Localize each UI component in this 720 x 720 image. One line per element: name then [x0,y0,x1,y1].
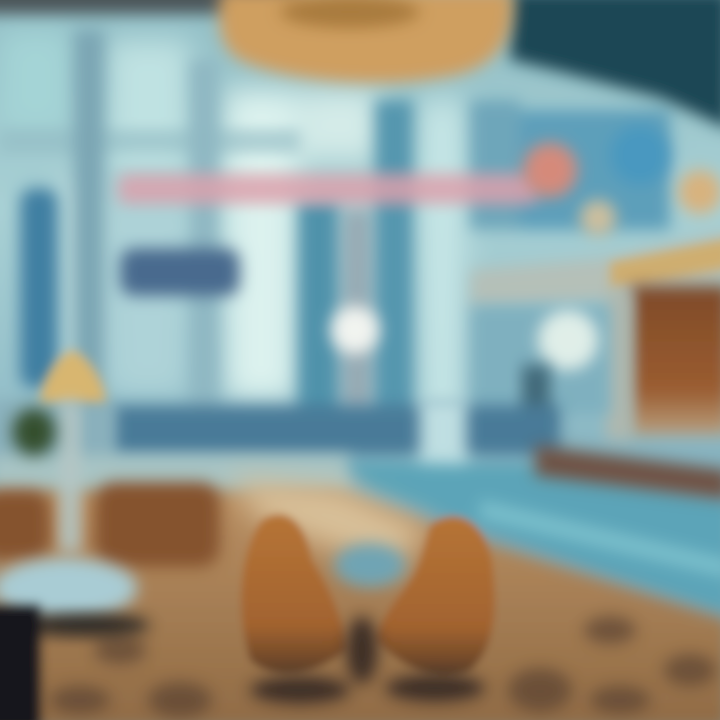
lower right windows [470,305,610,415]
lamp stand [60,402,80,552]
window columns [74,30,670,430]
white orb [331,306,379,354]
ceiling dark strip [0,0,300,14]
pendant lamp [219,0,513,83]
bright gap [420,400,466,490]
wood alcove [630,285,720,435]
dark figure [522,365,550,430]
back sofas [0,482,220,567]
wall stripe [480,500,720,578]
window panes [0,30,464,460]
ceiling right [510,0,720,130]
window base band [110,405,560,455]
dark blue blob [120,248,240,296]
left table lamp shade [40,350,106,402]
pool-blue wall [345,462,720,615]
bright right window [538,310,598,370]
left base band [0,400,115,470]
pink banner [118,174,538,204]
chair bases [250,616,485,704]
floor highlight [230,478,430,570]
table shadow [20,613,150,637]
lamp shade detail [280,0,420,28]
decorative balloons [523,125,720,236]
floor [0,490,720,720]
mezzanine balcony [470,232,720,308]
left chair [241,514,345,672]
plant [12,408,56,456]
alcove frame [606,290,632,440]
right chair [378,516,495,674]
horizontal window bar [0,130,300,152]
lounge haze [0,455,350,495]
mezzanine gold edge [610,238,720,288]
left tower [20,188,58,388]
floor pattern [50,616,716,718]
dark foreground object [0,605,40,720]
counter [535,445,720,500]
blue cushion [334,543,406,587]
side table [0,558,137,618]
